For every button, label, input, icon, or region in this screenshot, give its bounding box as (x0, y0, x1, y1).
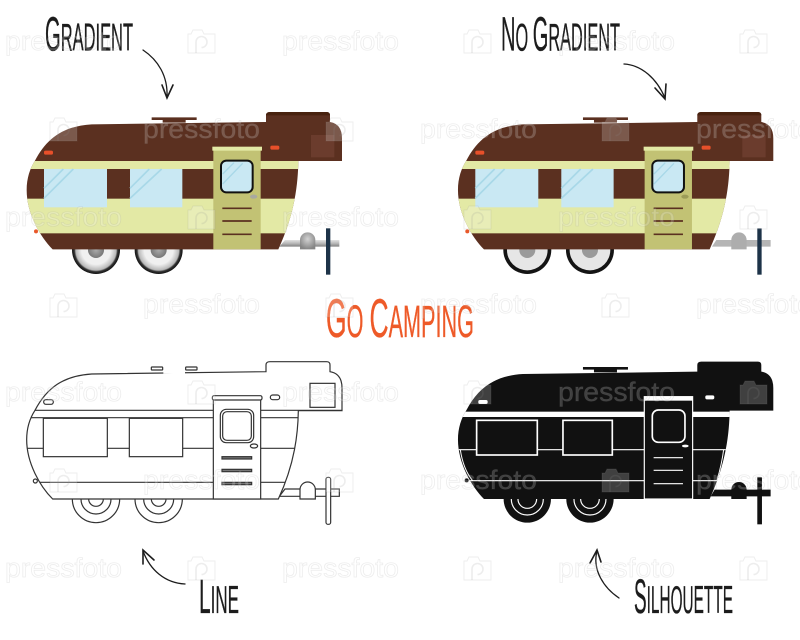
arrow: no gradient (624, 64, 666, 99)
door (644, 147, 693, 249)
watermark grid: pressfoto (282, 26, 399, 56)
arrow: gradient (143, 50, 173, 98)
arrow: line (143, 550, 185, 584)
window left (43, 418, 107, 457)
text: GRADIENT (45, 8, 133, 62)
camper body (27, 362, 342, 499)
window right (130, 169, 182, 207)
watermark grid: pressfoto (143, 114, 260, 144)
wheels (503, 226, 614, 274)
watermark grid: pressfoto (282, 377, 399, 407)
roof vent (152, 117, 197, 123)
lights (44, 146, 279, 155)
title: Go Camping: GO CAMPING (326, 287, 474, 349)
door (212, 147, 262, 249)
camper body (451, 362, 785, 499)
lights (475, 146, 711, 155)
watermark grid: pressfoto (420, 465, 537, 495)
camper body (20, 112, 353, 249)
watermark grid: pressfoto (420, 289, 537, 319)
tow hitch (711, 477, 771, 524)
roof vent (583, 367, 628, 372)
tow hitch (279, 228, 339, 275)
watermark grid: pressfoto (5, 202, 122, 232)
door (644, 396, 693, 499)
watermark grid: pressfoto (558, 202, 675, 232)
wheels (72, 475, 182, 523)
wheels (504, 475, 614, 523)
lights (44, 395, 280, 404)
arrow: silhouette (590, 550, 619, 598)
camper: no gradient version (451, 112, 785, 275)
watermark grid: pressfoto (143, 465, 260, 495)
tow hitch (279, 477, 339, 524)
roof vent (151, 367, 197, 370)
window left (44, 169, 107, 207)
watermark grid: pressfoto (558, 26, 675, 56)
tail light (465, 478, 469, 482)
tail light (465, 229, 469, 233)
watermark grid: pressfoto (5, 26, 122, 56)
watermark grid: pressfoto (420, 114, 537, 144)
label: No Gradient: NO GRADIENT (501, 8, 620, 62)
lights (478, 395, 714, 404)
watermark grid: pressfoto (282, 202, 399, 232)
window right (563, 420, 612, 455)
watermark grid: pressfoto (143, 289, 260, 319)
door (212, 396, 262, 499)
window left (477, 420, 537, 455)
watermark grid: pressfoto (5, 377, 122, 407)
tail light (33, 479, 37, 483)
camper: gradient version (20, 112, 353, 275)
wheels (72, 226, 183, 274)
watermark grid: pressfoto (558, 553, 675, 583)
label: Line: LINE (199, 571, 239, 624)
watermark grid: pressfoto (5, 553, 122, 583)
watermark grid: pressfoto (558, 377, 675, 407)
window right (129, 418, 183, 457)
camper: line version (27, 362, 342, 524)
window left (475, 169, 538, 207)
camper: silhouette version (451, 362, 785, 524)
tow hitch (712, 228, 771, 275)
roof vent (583, 117, 628, 123)
tail light (34, 229, 38, 233)
window right (561, 169, 614, 207)
camper body (451, 112, 785, 249)
watermark grid: pressfoto (282, 553, 399, 583)
